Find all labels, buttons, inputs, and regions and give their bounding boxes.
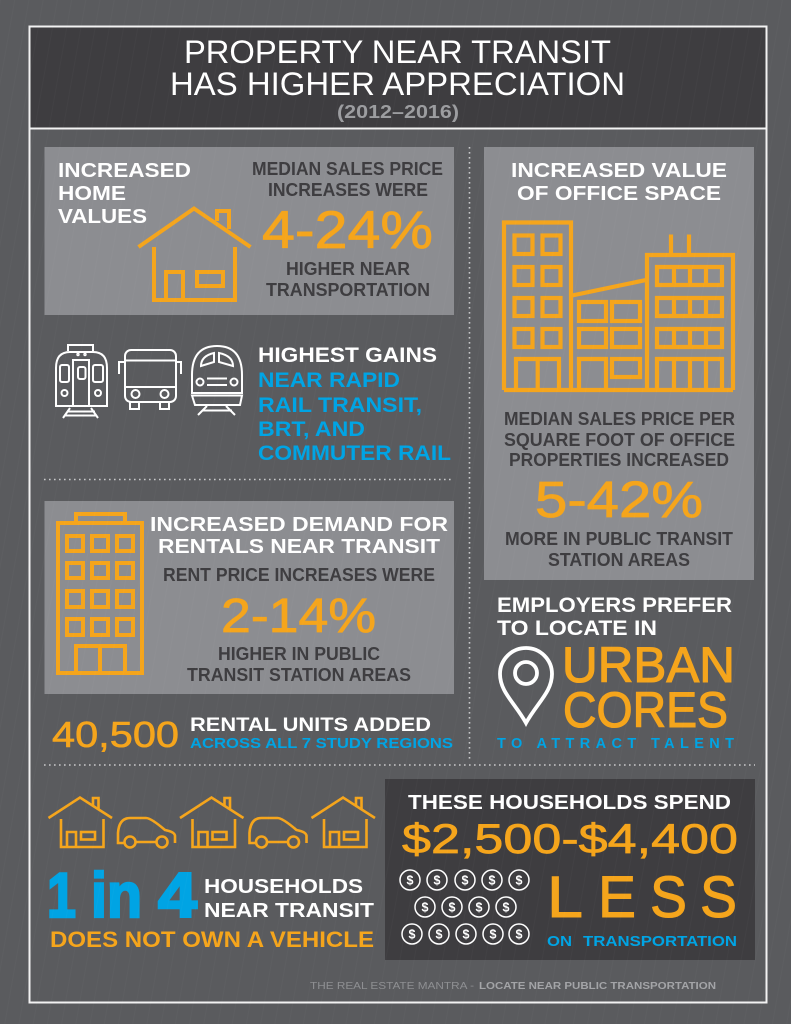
- stat: 1 in 4: 4: [158, 861, 197, 931]
- icon: dollar coins: $: [503, 900, 510, 914]
- stat: 1 in 4: in: [91, 861, 142, 931]
- text: median sales price: [252, 158, 443, 200]
- icon: small house 2: [180, 798, 244, 847]
- icon: house: [138, 208, 250, 300]
- text: less: [547, 865, 737, 930]
- icon: subway train: [56, 345, 107, 418]
- text: less: S: [650, 865, 687, 930]
- icon: small house 1: [48, 798, 112, 847]
- icon: dollar coins: $: [516, 874, 523, 888]
- text: median price per square foot: PROPERTIES INCREASED: [509, 449, 729, 470]
- icon: small car 2: [250, 818, 306, 848]
- stat: 2-14%: 2-14%: [221, 590, 376, 643]
- text: employers prefer: TO LOCATE IN: [497, 617, 657, 640]
- text: higher near transportation: TRANSPORTATION: [266, 279, 430, 300]
- panel: household savings: [385, 779, 755, 960]
- icon: dollar coins: $: [449, 900, 456, 914]
- stat: 40,500 rental units: ACROSS ALL 7 STUDY REGIONS: [190, 736, 453, 752]
- title: [170, 34, 625, 102]
- text: households near transit: HOUSEHOLDS: [204, 876, 363, 898]
- header band: [30, 27, 766, 128]
- title: PROPERTY NEAR TRANSIT: [184, 34, 611, 70]
- icon: dollar coins: $: [434, 874, 441, 888]
- icon: bus: [119, 350, 181, 409]
- text: highest gains: RAIL TRANSIT,: [258, 394, 422, 417]
- text: employers prefer: EMPLOYERS PREFER: [497, 594, 732, 617]
- icon: apartment building: [58, 514, 142, 673]
- icon: small car 1: [118, 818, 175, 848]
- text: higher near transportation: HIGHER NEAR: [286, 258, 410, 279]
- text: higher in station areas: TRANSIT STATION AREAS: [187, 664, 411, 685]
- text: highest gains: COMMUTER RAIL: [258, 442, 451, 465]
- text: highest gains: BRT, AND: [258, 418, 365, 441]
- text: higher in station areas: [187, 643, 411, 685]
- stat: savings range: $2,500-$4,400: [402, 815, 738, 862]
- icon: dollar coins: [400, 870, 529, 944]
- heading: increased demand for rentals: RENTALS NEAR TRANSIT: [158, 535, 441, 558]
- icon: dollar coins: $: [490, 928, 497, 942]
- icon: dollar coins: $: [436, 928, 443, 942]
- footer: THE REAL ESTATE MANTRA -: [310, 981, 474, 992]
- text: less: L: [547, 865, 583, 930]
- icon: dollar coins: $: [407, 874, 414, 888]
- heading: increased home values: INCREASED: [58, 159, 191, 182]
- text: on transportation: TRANSPORTATION: [583, 933, 737, 950]
- icon: dollar coins: $: [516, 928, 523, 942]
- text: rent price increases: RENT PRICE INCREASES WERE: [163, 564, 435, 585]
- text: highest gains: NEAR RAPID: [258, 369, 400, 392]
- date range: (2012–2016): [337, 102, 459, 122]
- text: to attract talent: TO ATTRACT TALENT: [497, 736, 734, 752]
- heading: increased demand for rentals: INCREASED DEMAND FOR: [150, 513, 448, 536]
- heading: increased demand for rentals: [150, 513, 448, 558]
- text: urban cores: CORES: [563, 682, 728, 738]
- panel: increased home values: [44, 147, 454, 315]
- stat: 40,500 rental units: [52, 714, 453, 755]
- stat: 1 in 4: 1: [47, 861, 76, 931]
- text: median price per square foot: [504, 408, 735, 470]
- heading: increased home values: HOME: [58, 182, 126, 205]
- heading: increased home values: [58, 159, 191, 228]
- text: households near transit: [204, 876, 374, 922]
- stat: 5-42%: 5-42%: [535, 471, 703, 528]
- icon row: houses and cars: [48, 798, 375, 848]
- text: less: S: [700, 865, 737, 930]
- panel: increased demand for rentals: [44, 501, 454, 694]
- text: more in station areas: [505, 528, 734, 570]
- text: median sales price: INCREASES WERE: [268, 179, 428, 200]
- stat: 40,500 rental units: 40,500: [52, 714, 179, 755]
- stat: 40,500 rental units: RENTAL UNITS ADDED: [190, 715, 431, 736]
- text: higher in station areas: HIGHER IN PUBLIC: [218, 643, 380, 664]
- icon: dollar coins: $: [409, 928, 416, 942]
- heading: office space: [511, 159, 727, 205]
- title: HAS HIGHER APPRECIATION: [170, 66, 625, 102]
- heading: office space: OF OFFICE SPACE: [517, 182, 721, 205]
- text: urban cores: URBAN: [562, 637, 735, 693]
- text: more in station areas: STATION AREAS: [548, 549, 690, 570]
- footer: [310, 981, 716, 992]
- text: employers prefer: [497, 594, 732, 640]
- icon: dollar coins: $: [489, 874, 496, 888]
- icon: dollar coins: $: [462, 874, 469, 888]
- text: on transportation: ON: [547, 933, 572, 950]
- text: higher near transportation: [266, 258, 430, 300]
- text: median price per square foot: MEDIAN SALES PRICE PER: [504, 408, 735, 429]
- text: these households spend: THESE HOUSEHOLDS SPEND: [408, 792, 731, 814]
- text: households near transit: NEAR TRANSIT: [204, 900, 374, 922]
- text: median sales price: MEDIAN SALES PRICE: [252, 158, 443, 179]
- stat: 4-24%: 4-24%: [262, 201, 433, 260]
- text: does not own a vehicle: DOES NOT OWN A VEHICLE: [50, 927, 374, 952]
- icon: dollar coins: $: [476, 900, 483, 914]
- heading: office space: INCREASED VALUE: [511, 159, 727, 182]
- text: more in station areas: MORE IN PUBLIC TRANSIT: [505, 528, 734, 549]
- footer: LOCATE NEAR PUBLIC TRANSPORTATION: [479, 981, 716, 992]
- icon: location pin: [500, 648, 552, 723]
- text: less: E: [598, 865, 636, 930]
- icon: office buildings: [504, 222, 733, 390]
- icon: small house 3: [312, 798, 375, 847]
- icon: dollar coins: $: [422, 900, 429, 914]
- text: urban cores: [562, 637, 735, 738]
- text: median price per square foot: SQUARE FOOT OF OFFICE: [504, 429, 735, 450]
- text: highest gains: [258, 344, 451, 465]
- icon: dollar coins: $: [463, 928, 470, 942]
- heading: increased home values: VALUES: [58, 205, 147, 228]
- stat: 1 in 4: [47, 861, 197, 931]
- icon: commuter train: [192, 346, 242, 415]
- panel: increased value of office space: [484, 147, 754, 580]
- text: highest gains: HIGHEST GAINS: [258, 344, 437, 367]
